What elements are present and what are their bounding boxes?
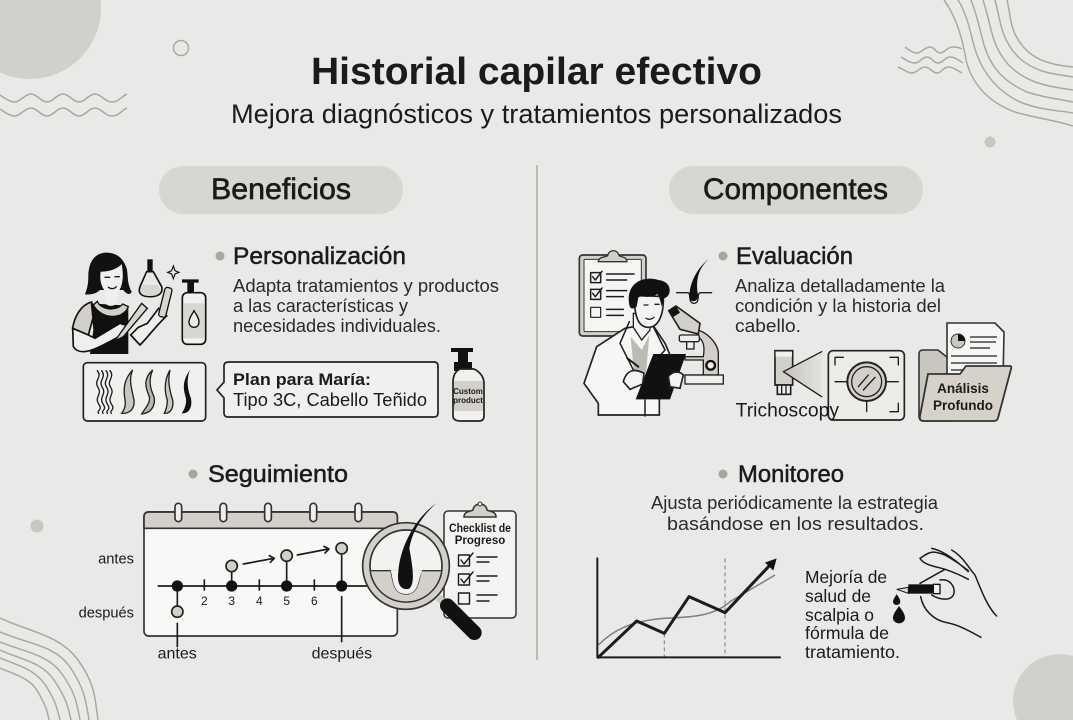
chart: calendar timeline: 3 xyxy=(228,594,235,608)
panel: Personalización xyxy=(73,243,499,421)
icon: custom product bottle: product xyxy=(453,396,483,405)
panel: Monitoreo xyxy=(597,461,997,662)
heading: Monitoreo: Monitoreo xyxy=(738,461,844,488)
text: Monitoreo description xyxy=(651,492,939,534)
heading: Componentes xyxy=(669,166,923,214)
icon: progress checklist: Checklist de xyxy=(449,523,511,535)
callout: Plan para María: Tipo 3C, Cabello Teñido xyxy=(233,389,427,410)
icon: trichoscopy device xyxy=(736,351,904,422)
text: Evaluación description: cabello. xyxy=(735,315,801,336)
text: Mejoría note: salud de xyxy=(805,586,871,606)
icon: folder Análisis Profundo: Análisis xyxy=(937,381,989,396)
callout: Plan para María: Plan para María: xyxy=(233,370,371,389)
chart: calendar timeline: 2 xyxy=(201,594,208,608)
text: Mejoría note: fórmula de xyxy=(805,623,889,643)
text: Mejoría note: tratamiento. xyxy=(805,642,900,662)
text: Personalización description xyxy=(233,275,499,336)
heading: Seguimiento: Seguimiento xyxy=(208,461,348,488)
icon: progress checklist xyxy=(444,502,516,618)
heading: Personalización: Personalización xyxy=(233,243,406,270)
heading: Beneficios xyxy=(159,166,403,214)
callout: Plan para María xyxy=(217,362,438,417)
icon: progress checklist: Progreso xyxy=(455,535,505,547)
chart: calendar timeline: 6 xyxy=(311,594,318,608)
icon: stylist with comb and products xyxy=(73,253,206,354)
text: Personalización description: necesidades individuales. xyxy=(233,315,441,336)
chart: calendar timeline: 4 xyxy=(256,594,263,608)
heading: Componentes: Componentes xyxy=(703,173,888,206)
icon: hair types box xyxy=(83,363,206,421)
chart: calendar timeline: antes xyxy=(158,645,197,662)
text: Personalización description: a las características y xyxy=(233,295,409,316)
text: Evaluación description: condición y la historia del xyxy=(735,295,941,316)
chart: calendar timeline xyxy=(79,503,397,662)
chart: calendar timeline: 5 xyxy=(283,594,290,608)
panel: Seguimiento xyxy=(79,461,516,662)
text: Mejoría note xyxy=(805,567,900,662)
icon: folder Análisis Profundo xyxy=(919,323,1011,421)
panel: Evaluación xyxy=(579,243,1011,422)
icon: folder Análisis Profundo: Profundo xyxy=(933,398,993,413)
text: Evaluación description xyxy=(735,275,946,336)
icon: specialist with microscope and clipboard xyxy=(579,251,723,416)
chart: calendar timeline: después xyxy=(79,605,134,621)
heading: Beneficios: Beneficios xyxy=(211,173,351,206)
text: Personalización description: Adapta tratamientos y productos xyxy=(233,275,499,296)
title: Historial capilar efectivo xyxy=(311,50,762,93)
icon: magnifier over hair follicle xyxy=(363,503,474,633)
text: Monitoreo description: basándose en los resultados. xyxy=(667,513,924,534)
text: Mejoría note: Mejoría de xyxy=(805,567,887,587)
text: Evaluación description: Analiza detalladamente la xyxy=(735,275,946,296)
text: Mejoría note: scalpia o xyxy=(805,605,874,625)
chart: calendar timeline: antes xyxy=(98,551,134,567)
icon: hand with dropper xyxy=(893,548,997,637)
icon: custom product bottle xyxy=(451,348,484,421)
heading: Evaluación: Evaluación xyxy=(736,243,853,270)
icon: custom product bottle: Custom xyxy=(453,387,483,396)
icon: trichoscopy device: Trichoscopy xyxy=(736,401,840,422)
chart: progress line chart xyxy=(597,558,780,657)
chart: calendar timeline: después xyxy=(312,645,372,662)
subtitle: Mejora diagnósticos y tratamientos personalizados xyxy=(231,99,842,129)
text: Monitoreo description: Ajusta periódicamente la estrategia xyxy=(651,492,939,513)
